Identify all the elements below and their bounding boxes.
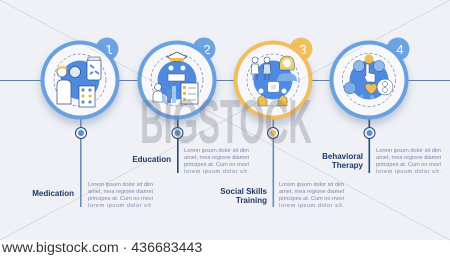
text block 2: Lorem ipsum dolor sit dim [184,148,249,154]
text block 1: principes at. Cum no movi [88,196,153,202]
text block 4: lorem ipsum dolor sit. [376,169,441,175]
text block 3: principes at. Cum no movi [279,196,344,202]
text block 4: principes at. Cum no movi [376,162,441,168]
badge 4: 4 [396,42,404,57]
badge 3 [290,38,312,60]
text block 2: principes at. Cum no movi [184,162,249,168]
connector 2 [172,115,183,173]
label: Behavioral Therapy: Behavioral [322,152,363,161]
connector 4 [364,115,375,173]
icon: medication [54,54,106,107]
step 1: medication [40,38,120,207]
text block 3: lorem ipsum dolor sit. [279,203,344,209]
text block 2: amet, mea regione diamet [184,155,249,161]
badge 2: 2 [203,42,211,57]
label: Social Skills Training: Social Skills [220,187,268,196]
text block 1 [88,182,153,209]
text block 1: lorem ipsum dolor sit. [88,203,153,209]
badge 3: 3 [299,42,307,57]
icon: education [151,52,203,106]
text block 3: Lorem ipsum dolor sit dim [279,182,344,188]
label: Medication: Medication [32,189,74,198]
text block 1: amet, mea regione diamet [88,189,153,195]
label: Behavioral Therapy [322,152,364,170]
step 4: behavioral therapy [330,38,410,173]
label: Education: Education [132,155,171,164]
text block 2 [184,148,249,175]
circle 1 [40,40,120,120]
text block 4: amet, mea regione diamet [376,155,441,161]
footer: source line: www.bigstock.com · 436683443 [1,240,202,256]
label: Behavioral Therapy: Therapy [332,161,364,170]
text block 3: amet, mea regione diamet [279,189,344,195]
label: Social Skills Training: Training [236,196,267,205]
label: Social Skills Training [220,187,268,205]
icon: emotions [342,54,396,106]
circle 2 [138,40,216,120]
badge 1 [96,38,118,60]
text block 1: Lorem ipsum dolor sit dim [88,182,153,188]
icon: social skills [247,54,299,106]
connector 3 [268,115,278,207]
circle 3 [234,40,312,120]
circle 4 [330,40,408,120]
text block 4: Lorem ipsum dolor sit dim [376,148,441,154]
badge 1: 1 [105,42,113,57]
step 3: social skills training [234,38,312,207]
horizontal timeline [0,80,450,81]
text block 3 [279,182,344,209]
text block 4 [376,148,441,175]
connector 1 [76,115,86,207]
step 2: education [138,38,216,173]
text block 2: lorem ipsum dolor sit. [184,169,249,175]
